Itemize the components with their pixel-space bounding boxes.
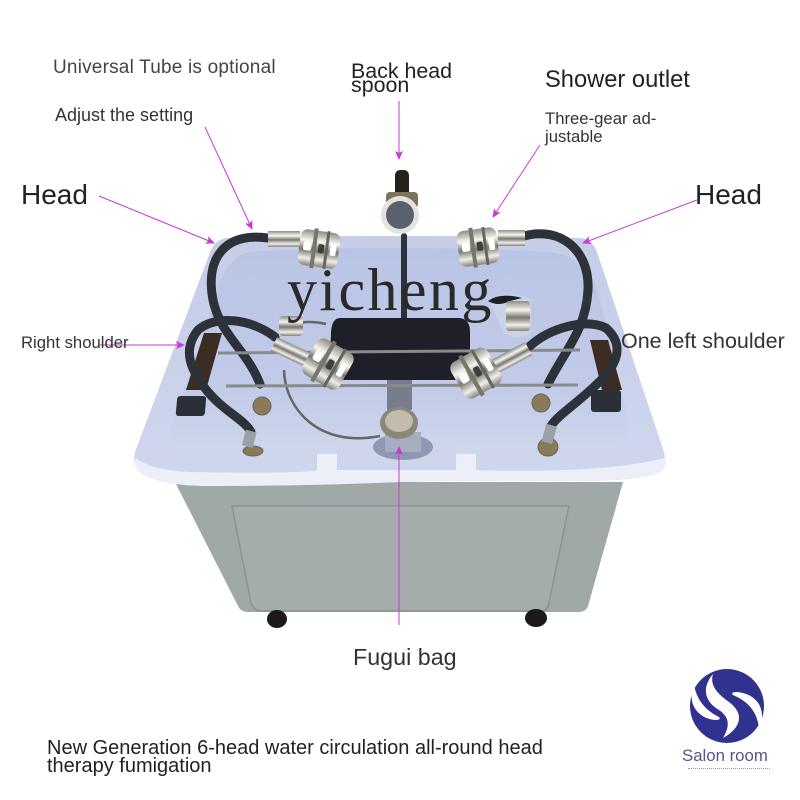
front left nozzle: [271, 334, 358, 394]
label: three-gear adjustable: justable: [545, 127, 603, 146]
cabinet door: [232, 506, 569, 611]
caption: [47, 737, 543, 777]
label: back head spoon: spoon: [351, 73, 409, 97]
small connector: [279, 316, 303, 336]
label: three-gear adjustable: [544, 109, 656, 146]
drain fitting: [373, 407, 433, 460]
back hoses: [211, 234, 588, 384]
front right nozzle: [446, 342, 532, 403]
label: shower outlet: Shower outlet: [545, 67, 690, 93]
logo: salon room: [682, 669, 770, 769]
logo text: Salon room: [682, 746, 768, 765]
basin rim: [134, 236, 665, 486]
rack supports: [186, 333, 622, 390]
label: three-gear adjustable: Three-gear ad-: [545, 109, 656, 128]
rack bars: [218, 350, 580, 386]
front hoses: [189, 320, 617, 432]
metal flex hose: [280, 322, 380, 438]
basin inner bowl: [171, 248, 629, 455]
label: universal tube: Universal Tube is optional: [53, 57, 276, 78]
floor connectors: [243, 394, 558, 456]
label: right shoulder: Right shoulder: [21, 333, 129, 352]
logo small print: [688, 768, 770, 769]
label: back head spoon: [351, 59, 452, 97]
label: head right: Head: [695, 179, 762, 210]
label: back head spoon: Back head: [351, 59, 452, 83]
caster wheels: [267, 609, 547, 628]
watermark: yicheng: [287, 257, 494, 323]
back head spoon shower: [381, 170, 419, 234]
caption: New Generation 6-head water circulation all-round head: [47, 737, 543, 759]
label: one left shoulder: One left shoulder: [621, 329, 785, 353]
logo mark: [690, 669, 764, 743]
hose ends: [242, 424, 557, 448]
faucet: [488, 294, 532, 338]
basin rim front highlight: [135, 446, 666, 486]
upper left nozzle: [268, 226, 342, 272]
upper right nozzle: [455, 224, 525, 270]
pad stem: [387, 380, 412, 410]
label: head left: Head: [21, 179, 88, 210]
cabinet: [175, 482, 623, 612]
neck pad: [330, 318, 470, 380]
label: adjust the setting: Adjust the setting: [55, 105, 193, 125]
caption: therapy fumigation: [47, 755, 212, 777]
label: fugui bag: Fugui bag: [353, 644, 457, 670]
